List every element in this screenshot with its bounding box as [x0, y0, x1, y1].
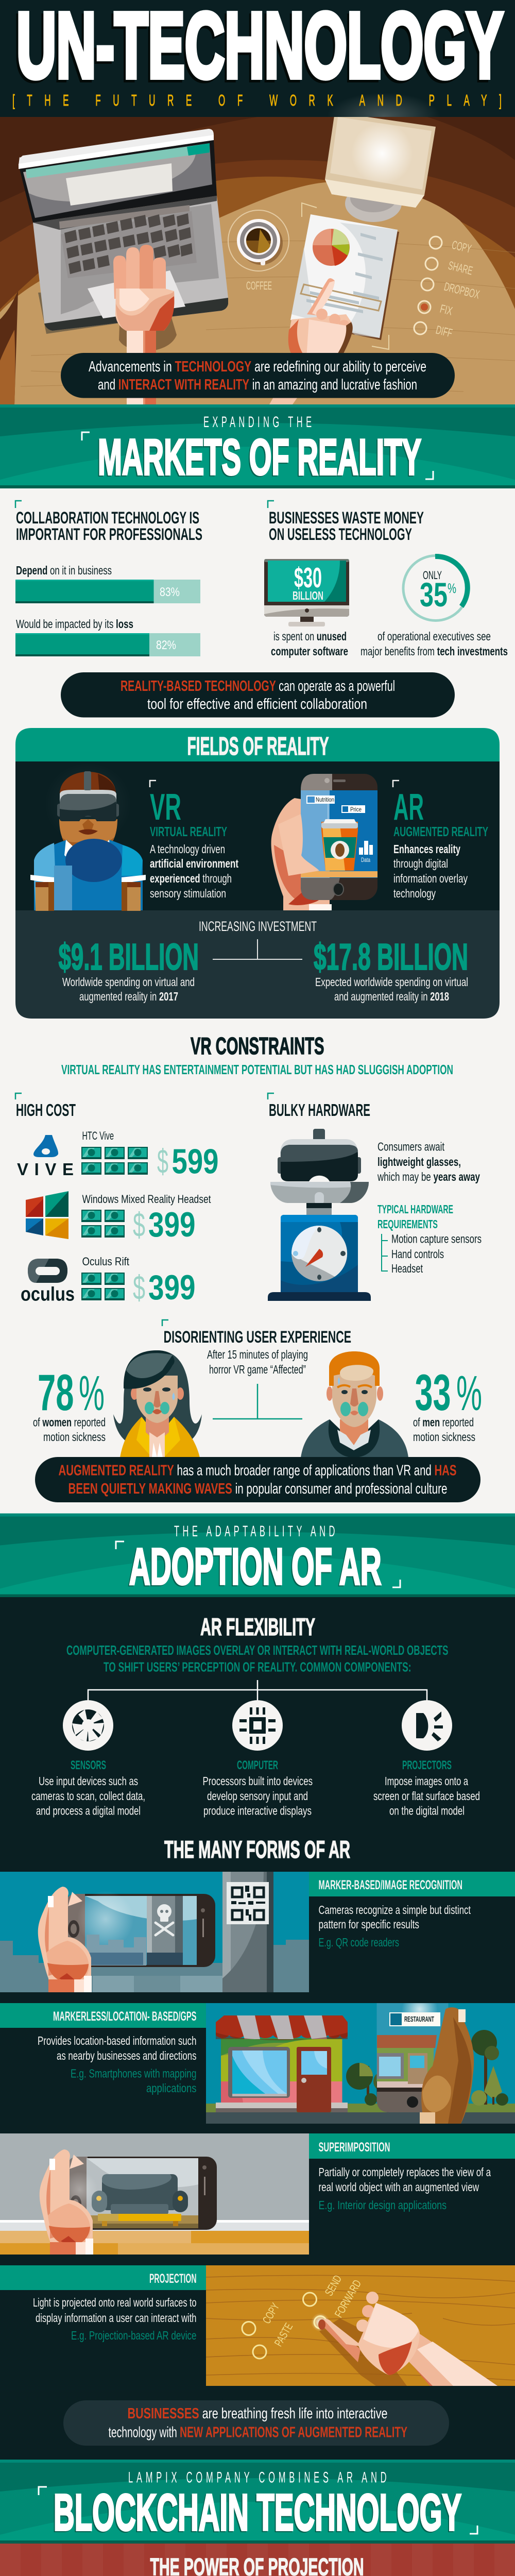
stat: 82 percent bar: Would be impacted by its loss	[16, 617, 133, 631]
icon: phone with AR overlay: Nutrition	[316, 796, 334, 803]
illustration: hand on projected wooden surface: PASTE	[272, 2320, 295, 2348]
icon: monitor with 30 billion: BILLION	[293, 589, 323, 602]
text: hardware requirements: Motion capture sensors	[391, 1232, 482, 1246]
text: AR description: information overlay	[393, 872, 468, 885]
text: projectors	[373, 1758, 480, 1818]
product: Windows Mixed Reality: $	[133, 1206, 145, 1244]
panel: disorienting user experience	[33, 1320, 482, 1458]
callout: intro statement: and INTERACT WITH REALITY in an amazing and lucrative fashion	[98, 377, 417, 393]
stat: 83 percent bar: Depend on it in business	[16, 564, 112, 577]
label: marker-based header	[309, 1872, 515, 1896]
text: sensors: Use input devices such as	[39, 1774, 138, 1788]
icon: desk lamp	[325, 112, 436, 222]
product: Oculus Rift: $	[133, 1268, 145, 1307]
background: stage	[0, 2544, 515, 2576]
section banner: adoption of AR: THE ADAPTABILITY AND	[174, 1523, 335, 1540]
chart: 35 percent donut: 35	[420, 575, 448, 614]
text: markerless description: Provides location-based information such	[38, 2034, 197, 2047]
label: superimposition header	[309, 2133, 515, 2159]
text: computer: COMPUTER	[237, 1758, 278, 1772]
stat: 33 percent: motion sickness	[413, 1430, 475, 1444]
panel: fields of reality	[15, 728, 500, 1019]
callout: businesses applications: BUSINESSES are breathing fresh life into interactive	[128, 2405, 387, 2422]
panel: disorienting user experience: DISORIENTING USER EXPERIENCE	[164, 1328, 351, 1346]
product: HTC Vive: HTC Vive	[82, 1129, 114, 1142]
section banner: blockchain technology: LAMPIX COMPANY COMBINES AR AND	[128, 2469, 387, 2486]
text: computer: produce interactive displays	[203, 1804, 312, 1818]
panel: superimposition	[0, 2133, 515, 2255]
panel: disorienting user experience: After 15 minutes of playing	[207, 1348, 308, 1361]
heading: the many forms of AR: THE MANY FORMS OF AR	[164, 1836, 350, 1863]
illustration: hand on projected wooden surface: FORWARD	[332, 2278, 364, 2319]
text: computer: develop sensory input and	[207, 1789, 308, 1803]
text: projectors: on the digital model	[389, 1804, 465, 1818]
illustration: hand on projected wooden surface: COPY	[260, 2300, 282, 2326]
panel: bulky hardware: BULKY HARDWARE	[269, 1100, 370, 1120]
section banner: adoption of AR	[0, 1514, 515, 1597]
text: hardware requirements: which may be years away	[377, 1170, 480, 1183]
stat: 78 percent: 78	[38, 1364, 74, 1421]
callout: intro statement: Advancements in TECHNOLOGY are redefining our ability to perceive	[89, 359, 426, 375]
stat: 82 percent bar	[15, 617, 200, 656]
stat: 82 percent bar: 82%	[156, 638, 176, 652]
text: hardware requirements: TYPICAL HARDWARE	[377, 1202, 453, 1216]
component: computer	[232, 1700, 283, 1751]
text: sensors	[31, 1758, 145, 1818]
product: HTC Vive: 599	[172, 1142, 218, 1181]
callout: reality-based technology: REALITY-BASED TECHNOLOGY can operate as a powerful	[121, 678, 395, 694]
menu: projected options	[414, 236, 481, 340]
stat: 33 percent: of men reported	[413, 1416, 474, 1429]
illustration: phone placing armchair in room	[0, 2133, 309, 2255]
product: Oculus Rift: oculus	[21, 1284, 75, 1306]
product: Windows Mixed Reality: 399	[148, 1205, 196, 1244]
panel: high cost	[15, 1093, 218, 1307]
product: Oculus Rift: Oculus Rift	[82, 1255, 129, 1268]
text: VR description: artificial environment	[150, 857, 238, 870]
text: VR description: sensory stimulation	[150, 887, 226, 900]
section banner: markets of reality	[0, 404, 515, 488]
stat: 33 percent: %	[456, 1366, 482, 1421]
panel: markerless	[0, 2003, 515, 2124]
heading: VR constraints: VR CONSTRAINTS	[191, 1032, 324, 1059]
callout: businesses applications	[63, 2400, 449, 2446]
panel: collaboration technology	[15, 501, 202, 656]
text: unused software	[271, 630, 348, 658]
text: projectors: PROJECTORS	[402, 1758, 452, 1772]
product: Windows Mixed Reality	[26, 1191, 211, 1244]
stat: 33 percent: 33	[415, 1364, 451, 1421]
stat: 83 percent bar	[15, 564, 200, 603]
text: hardware requirements: Hand controls	[391, 1247, 444, 1261]
text: marker-based description	[318, 1903, 471, 1949]
icon: monitor with 30 billion	[264, 559, 349, 626]
illustration: hand on projected wooden surface	[206, 2265, 515, 2386]
text: unused software: computer software	[271, 645, 348, 658]
text: sensors: SENSORS	[71, 1758, 106, 1772]
text: AR description: technology	[393, 887, 436, 900]
stat: 78 percent: %	[79, 1366, 105, 1421]
text: superimposition description	[318, 2165, 491, 2212]
heading: FIELDS OF REALITY	[187, 733, 329, 760]
chart: increasing investment: INCREASING INVESTMENT	[199, 919, 317, 934]
text: VR description: experienced through	[150, 872, 232, 885]
menu: projected options: DROPBOX	[443, 280, 481, 301]
text: VR description: VR	[150, 787, 181, 828]
product: Oculus Rift: 399	[148, 1268, 196, 1307]
text: marker-based description: pattern for specific results	[318, 1918, 419, 1931]
label: markerless header	[0, 2003, 206, 2028]
text: projectors: Impose images onto a	[385, 1774, 468, 1788]
subtitle: [THE FUTURE OF WORK AND PLAY]	[12, 92, 502, 109]
header band	[0, 0, 515, 139]
text: projection description: E.g. Projection-based AR device	[71, 2329, 197, 2342]
text: projection description: Light is projected onto real world surfaces to	[33, 2296, 197, 2309]
product: Oculus Rift	[21, 1255, 196, 1307]
text: markerless description: as nearby businesses and directions	[57, 2049, 197, 2062]
text: markerless description: E.g. Smartphones with mapping	[71, 2067, 197, 2080]
text: sensors: and process a digital model	[36, 1804, 141, 1818]
component: sensors	[63, 1700, 113, 1751]
stat: 83 percent bar: 83%	[160, 585, 180, 599]
label: superimposition header: SUPERIMPOSITION	[318, 2140, 390, 2155]
section banner: markets of reality: EXPANDING THE	[203, 414, 312, 431]
text: tech investments	[360, 630, 508, 658]
menu: projected options: FIX	[439, 302, 454, 318]
panel: businesses waste money: ON USELESS TECHNOLOGY	[269, 525, 412, 544]
callout: augmented reality applications	[35, 1457, 480, 1502]
icon: headset on a scale	[268, 1129, 371, 1301]
panel: collaboration technology: COLLABORATION TECHNOLOGY IS	[16, 509, 199, 527]
panel: disorienting user experience: horror VR game “Affected”	[209, 1363, 306, 1376]
callout: businesses applications: technology with NEW APPLICATIONS OF AUGMENTED REALITY	[108, 2425, 407, 2441]
text: superimposition description: E.g. Interior design applications	[318, 2198, 447, 2212]
product: Windows Mixed Reality: Windows Mixed Reality Headset	[82, 1193, 211, 1206]
label: projection header	[0, 2265, 206, 2290]
menu: projected options: SHARE	[447, 259, 474, 277]
product: HTC Vive: VIVE	[17, 1160, 74, 1179]
icon: document with pie chart	[290, 214, 399, 340]
product: HTC Vive: $	[157, 1142, 168, 1180]
callout: reality-based technology: tool for effective and efficient collaboration	[147, 696, 367, 713]
panel: businesses waste money	[264, 501, 508, 658]
menu: projected options: COPY	[451, 238, 473, 256]
panel: bulky hardware	[268, 1093, 482, 1301]
icon: coffee cup	[228, 210, 289, 271]
panel: AR flexibility	[31, 1613, 480, 1818]
text: hardware requirements: REQUIREMENTS	[377, 1217, 438, 1231]
illustration: storefront through a phone	[206, 2003, 515, 2124]
icon: laptop	[19, 129, 228, 334]
callout: intro statement	[61, 353, 455, 398]
panel: the power of projection	[0, 2544, 515, 2576]
panel: projection	[0, 2265, 515, 2386]
icon: right hand touching document	[269, 278, 353, 404]
text: VR description: VIRTUAL REALITY	[150, 824, 227, 839]
chart: increasing investment: and augmented reality in 2018	[334, 990, 449, 1003]
stat: 78 percent	[33, 1364, 106, 1444]
chart: increasing investment: $9.1 BILLION	[59, 937, 199, 978]
text: markerless description: applications	[146, 2081, 197, 2095]
chart: increasing investment: Worldwide spending on virtual and	[62, 975, 195, 989]
icon: queasy woman	[113, 1350, 202, 1458]
icon: person in VR headset	[30, 762, 146, 911]
icon: phone with AR overlay: Data	[361, 856, 370, 863]
text: projection description	[33, 2296, 197, 2342]
text: VR description: A technology driven	[150, 842, 225, 856]
icon: left hand on keyboard	[113, 245, 177, 404]
section banner: blockchain technology	[0, 2460, 515, 2544]
icon: queasy man	[301, 1351, 408, 1458]
illustration: storefront through a phone: RESTAURANT	[404, 2015, 434, 2024]
chart: 35 percent donut	[403, 555, 468, 620]
menu: projected options: DIFF	[435, 323, 454, 340]
chart: 35 percent donut: %	[448, 581, 456, 596]
text: AR description	[393, 781, 488, 900]
product: HTC Vive	[17, 1129, 218, 1181]
text: hardware requirements: Headset	[391, 1262, 423, 1275]
panel: high cost: HIGH COST	[16, 1100, 76, 1120]
label: projection header: PROJECTION	[149, 2272, 197, 2286]
text: computer	[203, 1758, 313, 1818]
chart: increasing investment: augmented reality in 2017	[79, 990, 178, 1003]
panel: collaboration technology: IMPORTANT FOR PROFESSIONALS	[16, 525, 202, 544]
text: computer: Processors built into devices	[203, 1774, 313, 1788]
icon: phone with AR overlay	[271, 774, 377, 910]
icon: monitor with 30 billion: $30	[294, 562, 322, 594]
text: VR description	[150, 781, 238, 900]
stat: 33 percent	[413, 1364, 482, 1444]
illustration: phone scanning QR code	[0, 1872, 309, 1992]
illustration: hand on projected wooden surface: SEND	[322, 2273, 344, 2298]
text: hardware requirements: lightweight glasses,	[377, 1155, 461, 1168]
text: AR description: Enhances reality	[393, 842, 460, 856]
label: markerless header: MARKERLESS/LOCATION- BASED/GPS	[53, 2009, 197, 2024]
panel: marker-based	[0, 1872, 515, 1992]
callout: reality-based technology	[61, 672, 455, 717]
text: sensors: cameras to scan, collect data,	[31, 1789, 145, 1803]
stat: 78 percent: of women reported	[33, 1416, 106, 1429]
text: marker-based description: E.g. QR code readers	[318, 1936, 399, 1949]
panel: businesses waste money: BUSINESSES WASTE MONEY	[269, 509, 424, 527]
chart: 35 percent donut: ONLY	[423, 569, 442, 582]
panel: AR flexibility: AR FLEXIBILITY	[200, 1613, 315, 1640]
hero illustration: desk scene	[0, 112, 515, 404]
chart: increasing investment	[59, 919, 468, 1003]
stat: 78 percent: motion sickness	[43, 1430, 106, 1444]
icon: phone with AR overlay: Price	[350, 806, 362, 813]
text: projection description: display information a user can interact with	[36, 2311, 197, 2325]
text: coffee label: COFFEE	[246, 279, 272, 292]
heading: VR constraints	[61, 1032, 453, 1077]
component: projectors	[402, 1700, 452, 1751]
text: AR description: through digital	[393, 857, 448, 870]
text: markerless description	[38, 2034, 197, 2095]
text: hardware requirements: Consumers await	[377, 1140, 444, 1153]
text: AR description: AR	[393, 787, 424, 828]
text: unused software: is spent on unused	[273, 630, 347, 643]
background: dark AR section	[0, 1597, 515, 2460]
text: hardware requirements	[377, 1140, 482, 1275]
